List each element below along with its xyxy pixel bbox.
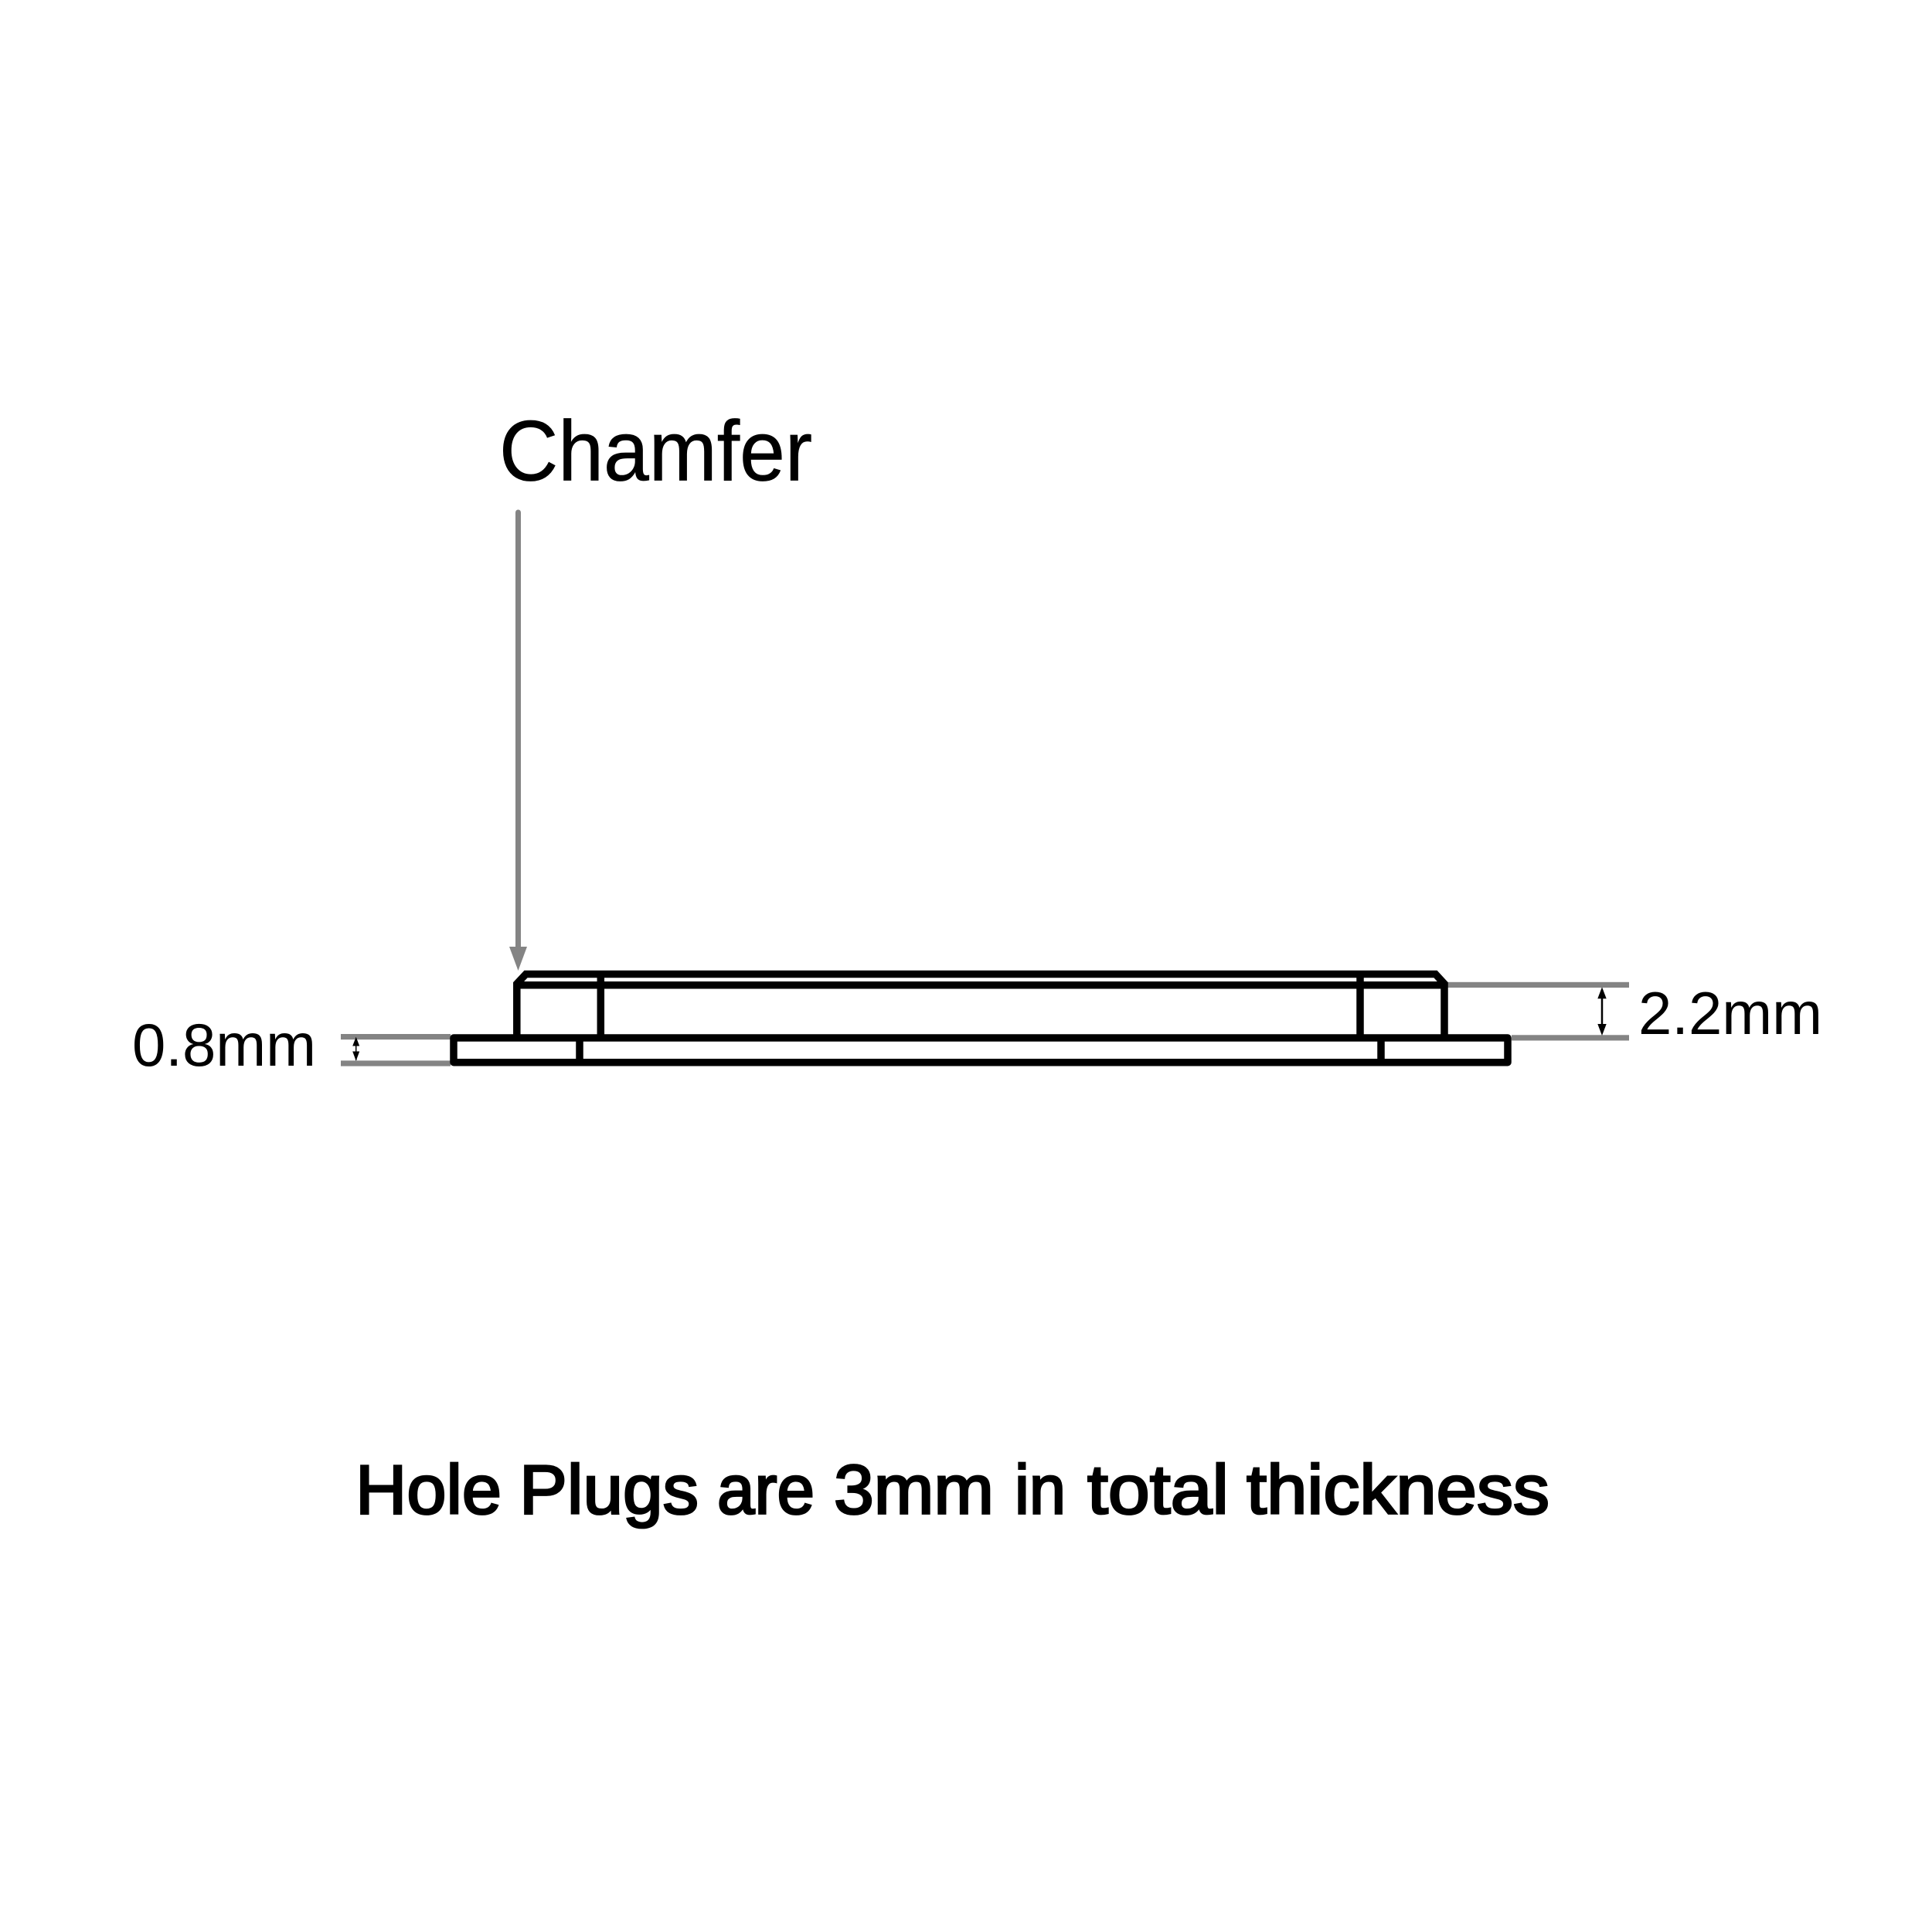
- dimension arrow: 0.8mm: [352, 1037, 359, 1061]
- arrow: chamfer pointer: [509, 512, 527, 971]
- caption: total thickness: 3mm: [834, 1451, 994, 1529]
- plug profile: upper boss with chamfer: [517, 974, 1444, 1038]
- caption: total thickness: in: [1015, 1451, 1066, 1529]
- label: 2.2mm: 2.2mm: [1638, 979, 1822, 1047]
- caption: total thickness: Plugs: [519, 1451, 699, 1529]
- dimension arrow: 2.2mm: [1597, 987, 1607, 1036]
- dimension lines: 0.8mm: [341, 1034, 451, 1066]
- caption: total thickness: thickness: [1247, 1451, 1549, 1529]
- caption: total thickness: total: [1087, 1451, 1229, 1529]
- caption: total thickness: [355, 1451, 1549, 1529]
- plug profile: base flange: [454, 1038, 1508, 1063]
- label: 0.8mm: 0.8mm: [132, 1011, 316, 1079]
- dimension lines: 2.2mm: [1447, 982, 1629, 1040]
- caption: total thickness: are: [717, 1451, 815, 1529]
- label: Chamfer: Chamfer: [499, 403, 812, 499]
- caption: total thickness: Hole: [355, 1451, 502, 1529]
